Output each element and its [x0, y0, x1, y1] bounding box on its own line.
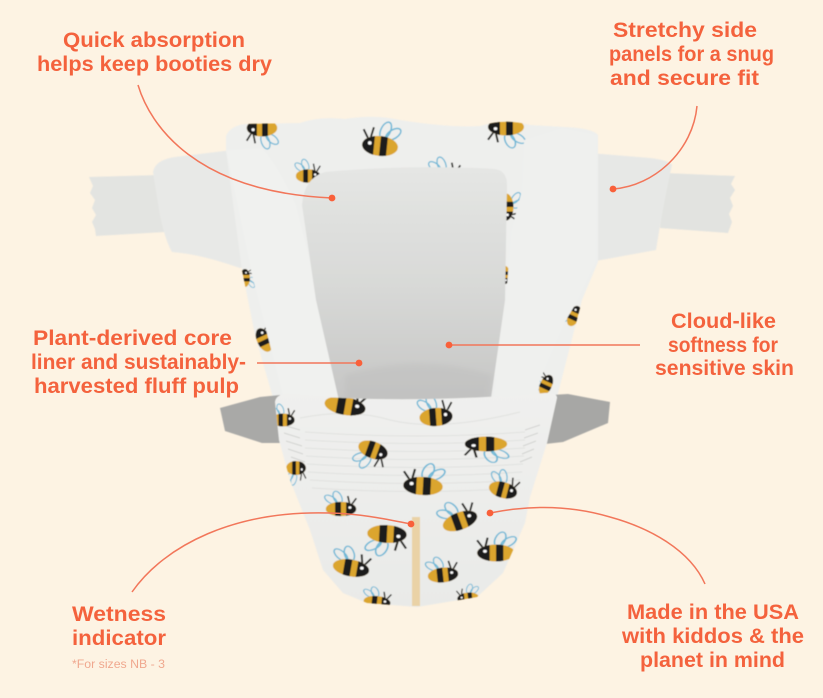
- wetness indicator strip: [412, 517, 420, 606]
- text: quick absorption: Quick absorption: [63, 29, 245, 52]
- text: stretchy side panels: Stretchy side: [613, 19, 757, 42]
- text: made in the USA: with kiddos & the: [621, 625, 804, 648]
- bee: [362, 120, 402, 157]
- text: cloud-like softness: softness for: [668, 334, 778, 357]
- bee: [428, 156, 462, 168]
- leader: wetness indicator: [132, 513, 414, 592]
- text: quick absorption: helps keep booties dry: [37, 53, 272, 76]
- bee: [241, 268, 256, 288]
- bee: [538, 372, 554, 394]
- bee: [564, 305, 581, 327]
- text: made in the USA: Made in the USA: [627, 601, 799, 624]
- right inner flap: [490, 128, 597, 405]
- front of diaper: [275, 393, 557, 607]
- leader: side panels: [610, 106, 697, 192]
- bee: [352, 440, 388, 470]
- bee: [323, 490, 356, 516]
- text: plant-derived core: liner and sustainably-: [31, 351, 246, 374]
- bee: [456, 583, 480, 601]
- bee: [324, 396, 367, 416]
- text: plant-derived core: Plant-derived core: [33, 327, 232, 350]
- bee: [488, 118, 527, 149]
- bee: [477, 531, 518, 562]
- bee: [332, 545, 372, 578]
- text: cloud-like softness: sensitive skin: [655, 357, 794, 380]
- waistband ruffles: [283, 412, 540, 492]
- front bee print: [275, 396, 521, 606]
- back of diaper: [226, 117, 598, 405]
- text: wetness indicator: [72, 603, 166, 671]
- leader: quick absorption: [138, 85, 335, 201]
- bee: [247, 120, 280, 150]
- text: wetness indicator: indicator: [72, 627, 166, 650]
- bee: [465, 436, 511, 464]
- text: stretchy side panels: and secure fit: [610, 67, 759, 90]
- left grey waist tab: [220, 395, 282, 443]
- text: wetness indicator: Wetness: [72, 603, 166, 626]
- text: cloud-like softness: [655, 310, 794, 380]
- bee: [284, 461, 306, 486]
- leader: core liner: [257, 360, 362, 366]
- bee: [436, 501, 478, 532]
- bee: [403, 461, 448, 496]
- right stretchy side panel: [590, 153, 672, 262]
- text: quick absorption: [37, 29, 272, 76]
- leader: made in the USA: [487, 507, 705, 584]
- text: made in the USA: [621, 601, 804, 672]
- bee: [504, 266, 509, 284]
- diaper illustration: [89, 117, 735, 609]
- core bottom shadow: [345, 364, 492, 405]
- footnote: *For sizes NB - 3: [72, 659, 165, 671]
- bee: [416, 398, 454, 427]
- bee: [275, 403, 296, 428]
- left inner flap: [226, 148, 345, 405]
- bee: [362, 524, 407, 558]
- bee: [424, 556, 459, 584]
- text: stretchy side panels: panels for a snug: [609, 43, 774, 66]
- text: cloud-like softness: Cloud-like: [671, 310, 776, 333]
- right grey waist tab: [545, 394, 610, 444]
- text: made in the USA: planet in mind: [640, 649, 785, 672]
- right fastening tape: [660, 173, 735, 233]
- leader: softness: [446, 342, 640, 348]
- bee: [488, 468, 521, 500]
- bee: [506, 192, 522, 221]
- text: plant-derived core: harvested fluff pulp: [34, 375, 239, 398]
- text: plant-derived core: [31, 327, 246, 398]
- back bee print: [240, 118, 584, 399]
- left stretchy side panel: [153, 150, 260, 268]
- bee: [293, 158, 320, 183]
- bee: [254, 327, 272, 352]
- bee: [362, 586, 392, 606]
- absorbent core: [302, 167, 507, 405]
- left fastening tape: [89, 175, 165, 236]
- text: stretchy side panels: [609, 19, 774, 90]
